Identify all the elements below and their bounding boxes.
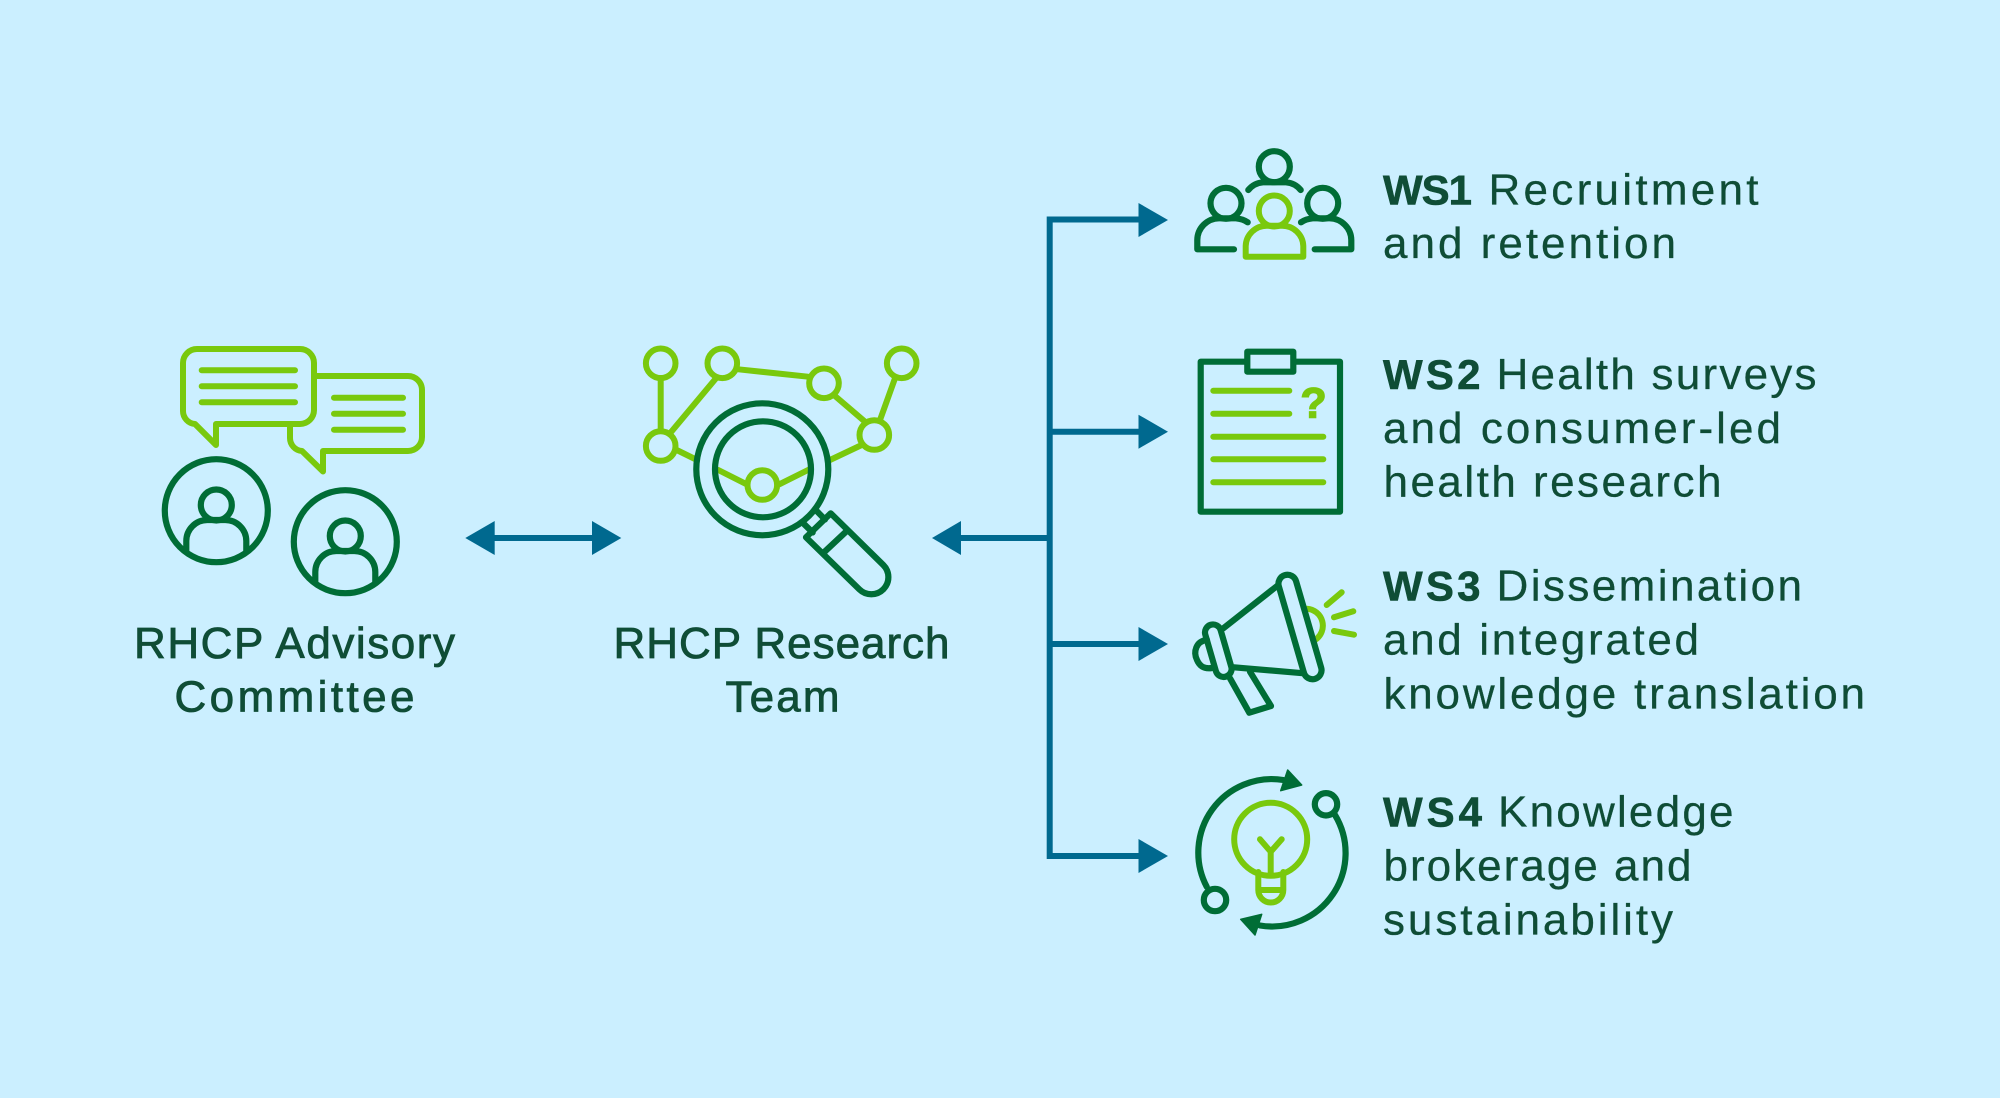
- text: WS2 Health surveys and consumer-led health research: and consumer-led: [1383, 404, 1781, 453]
- label: RHCP Research Team: RHCP Research: [614, 619, 950, 668]
- icon: research network with magnifying glass: [646, 348, 916, 594]
- arrow: to WS4: [1138, 839, 1168, 873]
- label: RHCP Research Team: [614, 619, 950, 721]
- arrow: two-way between committee and team: [465, 521, 621, 555]
- text: WS2 Health surveys and consumer-led health research: [1383, 350, 1816, 507]
- icon: WS4 light bulb with cycle arrows: [1198, 770, 1346, 935]
- icon: WS2 clipboard survey: [1201, 352, 1340, 512]
- icon: WS1 group of people: [1197, 151, 1351, 257]
- person in circle: left: [165, 459, 268, 562]
- text: WS2 Health surveys and consumer-led health research: health research: [1384, 458, 1722, 507]
- arrow: to WS1: [1138, 203, 1168, 237]
- label: RHCP Advisory Committee: RHCP Advisory: [134, 619, 455, 668]
- label: RHCP Advisory Committee: [134, 619, 455, 721]
- text: WS2 Health surveys and consumer-led health research: WS2: [1383, 351, 1480, 398]
- magnifying glass: [696, 403, 888, 594]
- text: WS4 Knowledge brokerage and sustainability: [1383, 788, 1734, 945]
- arrow: to WS2: [1138, 415, 1168, 449]
- text: WS4 Knowledge brokerage and sustainability: brokerage and: [1384, 842, 1692, 891]
- arrow: to research team: [932, 521, 961, 555]
- arrow: to WS3: [1138, 627, 1168, 661]
- speech bubble: front: [183, 349, 314, 445]
- text: WS1 Recruitment and retention: WS1: [1383, 167, 1472, 214]
- text: WS4 Knowledge brokerage and sustainability: WS4: [1383, 789, 1483, 836]
- network nodes and links: [646, 348, 916, 500]
- icon: WS2 clipboard survey: ?: [1300, 379, 1327, 427]
- text: WS1 Recruitment and retention: Recruitment: [1488, 166, 1758, 215]
- text: WS1 Recruitment and retention: and retention: [1383, 219, 1676, 268]
- text: WS3 Dissemination and integrated knowledge translation: WS3: [1383, 563, 1480, 610]
- person in circle: right: [294, 490, 397, 593]
- text: WS2 Health surveys and consumer-led health research: Health surveys: [1496, 350, 1816, 399]
- text: WS3 Dissemination and integrated knowledge translation: and integrated: [1383, 616, 1699, 665]
- text: WS3 Dissemination and integrated knowledge translation: [1383, 562, 1865, 719]
- text: WS4 Knowledge brokerage and sustainability: sustainability: [1383, 896, 1673, 945]
- icon: WS3 megaphone: [1195, 573, 1354, 713]
- text: WS1 Recruitment and retention: [1383, 166, 1758, 268]
- label: RHCP Research Team: Team: [726, 672, 840, 721]
- text: WS4 Knowledge brokerage and sustainability: Knowledge: [1498, 788, 1734, 837]
- text: WS3 Dissemination and integrated knowledge translation: Dissemination: [1496, 562, 1802, 611]
- connector tree: trunk with branches and arrows: [932, 203, 1168, 873]
- text: WS3 Dissemination and integrated knowledge translation: knowledge translation: [1384, 670, 1865, 719]
- label: RHCP Advisory Committee: Committee: [174, 672, 414, 721]
- speech bubble: back: [290, 376, 422, 472]
- icon: advisory committee chat bubbles and people: [165, 349, 422, 593]
